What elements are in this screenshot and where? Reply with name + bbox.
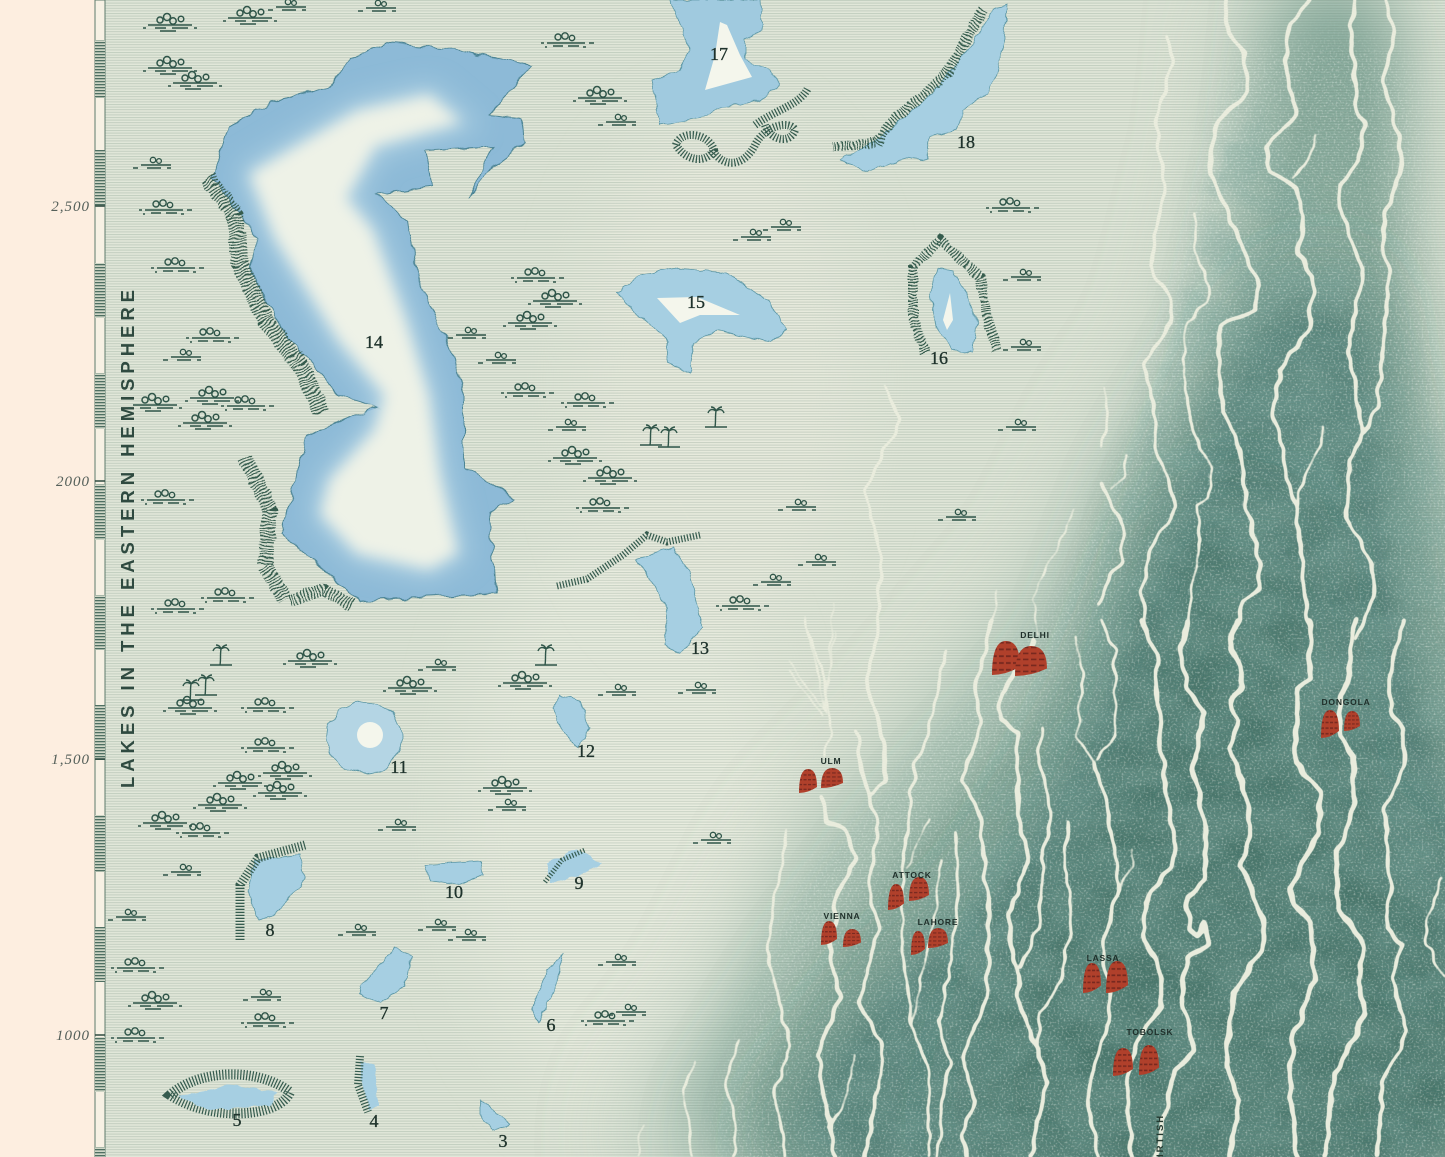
lake 17: [652, 0, 780, 125]
lake 10: [425, 862, 483, 885]
lake 3: [480, 1100, 510, 1129]
lake numbers: 9: [574, 873, 584, 893]
lake numbers: 17: [710, 44, 728, 64]
city labels: TOBOLSK: [1126, 1027, 1174, 1037]
lake numbers: 15: [687, 292, 705, 312]
rivers: lower reaches: [788, 620, 1445, 1157]
lake 18: [833, 5, 1007, 172]
city blocks: [799, 641, 1360, 1076]
lake numbers: 13: [691, 638, 709, 658]
lake 16: [913, 240, 997, 353]
lake numbers: 10: [445, 882, 463, 902]
city: Tobolsk: [1113, 1045, 1159, 1076]
city labels: ULM: [821, 756, 841, 766]
river name: IRTISH: [1155, 1114, 1166, 1157]
lake numbers: 6: [546, 1015, 556, 1035]
vegetation clusters: [108, 0, 1041, 1042]
lake 13: [557, 535, 702, 654]
city labels: ATTOCK: [892, 870, 932, 880]
lake numbers: 11: [390, 757, 408, 777]
city labels: VIENNA: [824, 911, 860, 921]
dark river basin shading: [640, 0, 1445, 1157]
scale labels: 2,500: [51, 199, 90, 215]
lake numbers: 12: [577, 741, 595, 761]
lake numbers: 8: [266, 920, 274, 940]
lake 7: [360, 948, 412, 1003]
city labels: DONGOLA: [1321, 697, 1371, 707]
lake numbers: 5: [232, 1110, 242, 1130]
lake 9: [545, 849, 603, 883]
cliff rings below lake 17: [676, 88, 808, 163]
vertical heading: LAKES IN THE EASTERN HEMISPHERE: [117, 290, 138, 788]
city labels: [821, 630, 1371, 1037]
scale labels: 1,500: [51, 752, 90, 768]
scale labels: 1000: [56, 1028, 90, 1044]
lake numbers: 4: [370, 1111, 378, 1131]
lake 15: [617, 268, 787, 373]
lake numbers: 3: [498, 1131, 508, 1151]
smaller lakes: [170, 0, 1007, 1129]
rivers: upper reaches: [637, 0, 1402, 1157]
city: Attock: [888, 877, 929, 910]
height scale bar: [95, 0, 105, 1157]
city: Lassa: [1083, 961, 1128, 993]
city labels: LAHORE: [918, 917, 958, 927]
lake 5: [170, 1074, 290, 1113]
lake numbers: 18: [957, 132, 975, 152]
lake numbers: 14: [365, 332, 383, 352]
city: Lahore: [911, 928, 948, 955]
lake 8: [240, 845, 305, 940]
city labels: LASSA: [1087, 953, 1119, 963]
city: Dongola: [1321, 710, 1360, 738]
lake 12: [553, 695, 590, 748]
city: Ulm: [799, 768, 843, 793]
city: Delhi: [992, 641, 1047, 676]
city: Vienna: [821, 921, 861, 947]
scale labels: [51, 199, 90, 1044]
lake 4: [358, 1056, 378, 1112]
lake numbers: [232, 44, 975, 1151]
lake numbers: 7: [380, 1003, 388, 1023]
lake 11: [326, 702, 402, 774]
lake numbers: 16: [930, 348, 948, 368]
city labels: DELHI: [1020, 630, 1050, 640]
cliff hachures beside lake 14: [208, 178, 352, 605]
lake 14 with cliffs: [211, 43, 532, 601]
scale labels: 2000: [56, 474, 90, 490]
lake 6: [532, 955, 563, 1023]
